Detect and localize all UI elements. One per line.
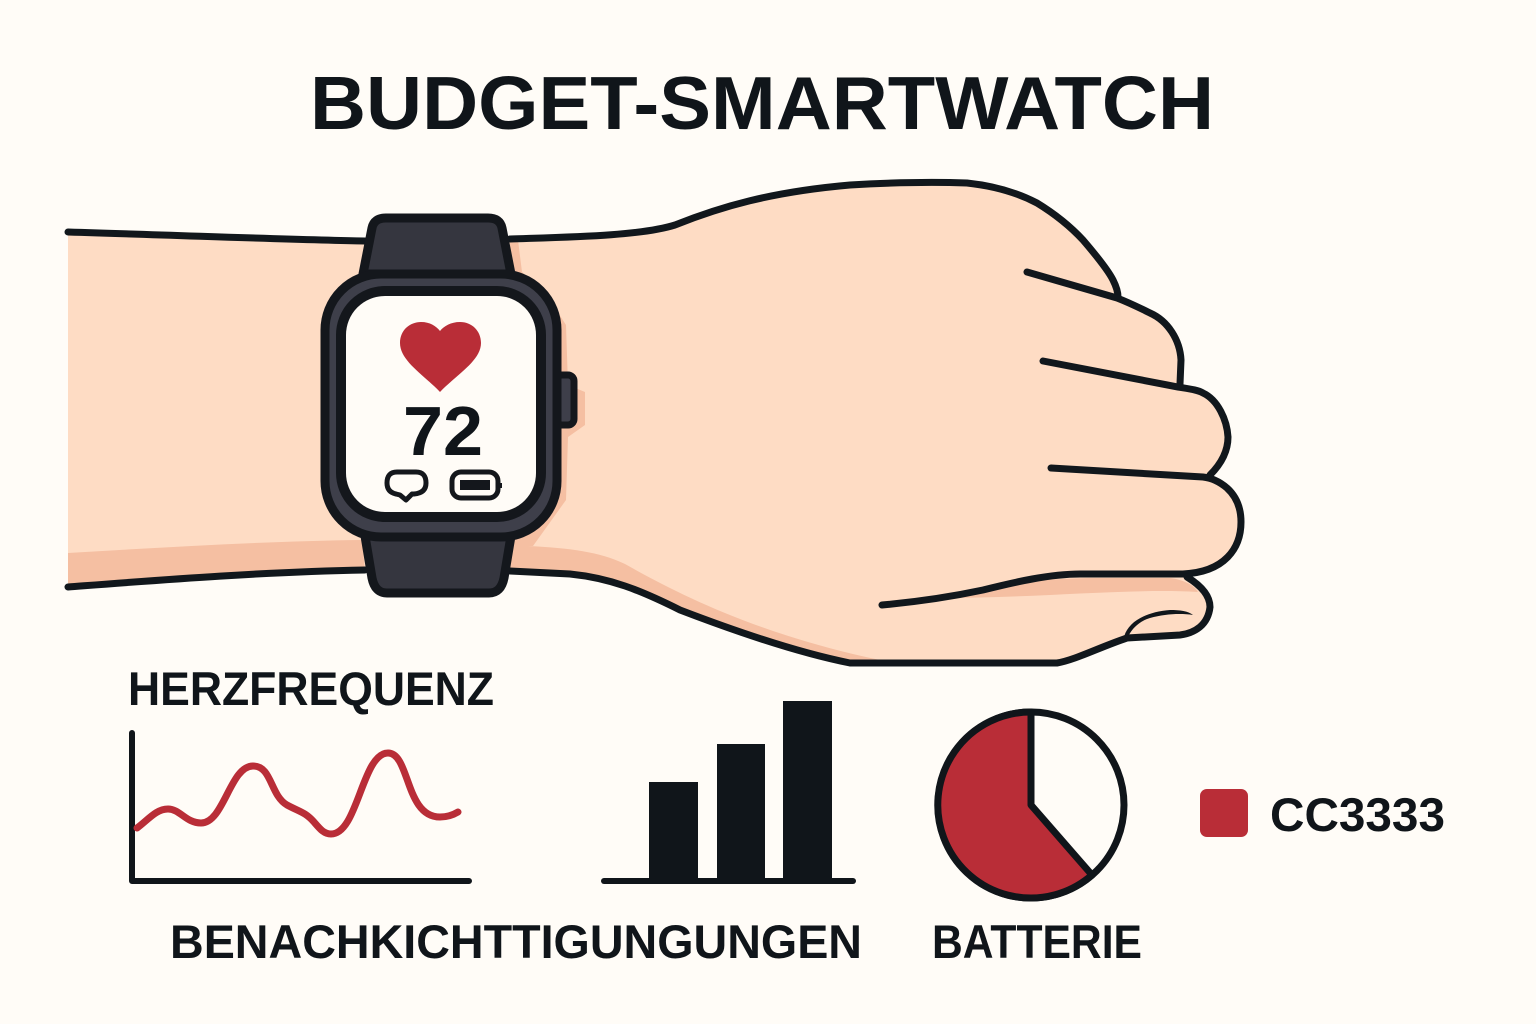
legend bbox=[1200, 788, 1445, 841]
illustration: arm and fist bbox=[68, 182, 1241, 663]
icon: message bubble bbox=[387, 472, 426, 500]
line chart: heart rate bbox=[132, 733, 469, 881]
label: battery: BATTERIE bbox=[932, 915, 1142, 968]
bar 3 bbox=[783, 701, 832, 880]
heart rate value: 72 bbox=[403, 392, 483, 470]
thumbnail bbox=[1124, 610, 1193, 637]
bar chart: notifications bbox=[604, 701, 853, 881]
legend label: CC3333 bbox=[1270, 788, 1445, 841]
pie chart: battery bbox=[938, 712, 1124, 898]
icon: heart bbox=[400, 322, 481, 392]
pie wedge bbox=[938, 712, 1092, 898]
top strap bbox=[363, 218, 511, 274]
finger lines bbox=[882, 272, 1241, 605]
title: BUDGET-SMARTWATCH bbox=[310, 61, 1214, 145]
skin shading: under fingers bbox=[940, 578, 1198, 598]
bottom strap bbox=[365, 536, 511, 593]
bar 2 bbox=[717, 744, 765, 880]
crown button bbox=[556, 375, 574, 425]
legend swatch bbox=[1200, 789, 1248, 837]
heart rate curve bbox=[137, 753, 458, 834]
icon: battery bbox=[452, 472, 502, 498]
heading: heart rate: HERZFREQUENZ bbox=[128, 662, 494, 715]
thumb bbox=[68, 570, 1210, 663]
bar 1 bbox=[649, 782, 698, 880]
skin shading: watch shadow bbox=[510, 240, 585, 546]
bar chart baseline bbox=[604, 878, 853, 884]
label: notifications: BENACHKICHTTIGUNGUNGEN bbox=[170, 915, 862, 968]
screen bbox=[341, 291, 541, 517]
arm outline bbox=[68, 182, 1118, 297]
skin shading: wrist bbox=[68, 540, 880, 663]
smartwatch bbox=[325, 218, 574, 593]
chart axes bbox=[132, 733, 469, 881]
watch case bbox=[325, 274, 557, 537]
